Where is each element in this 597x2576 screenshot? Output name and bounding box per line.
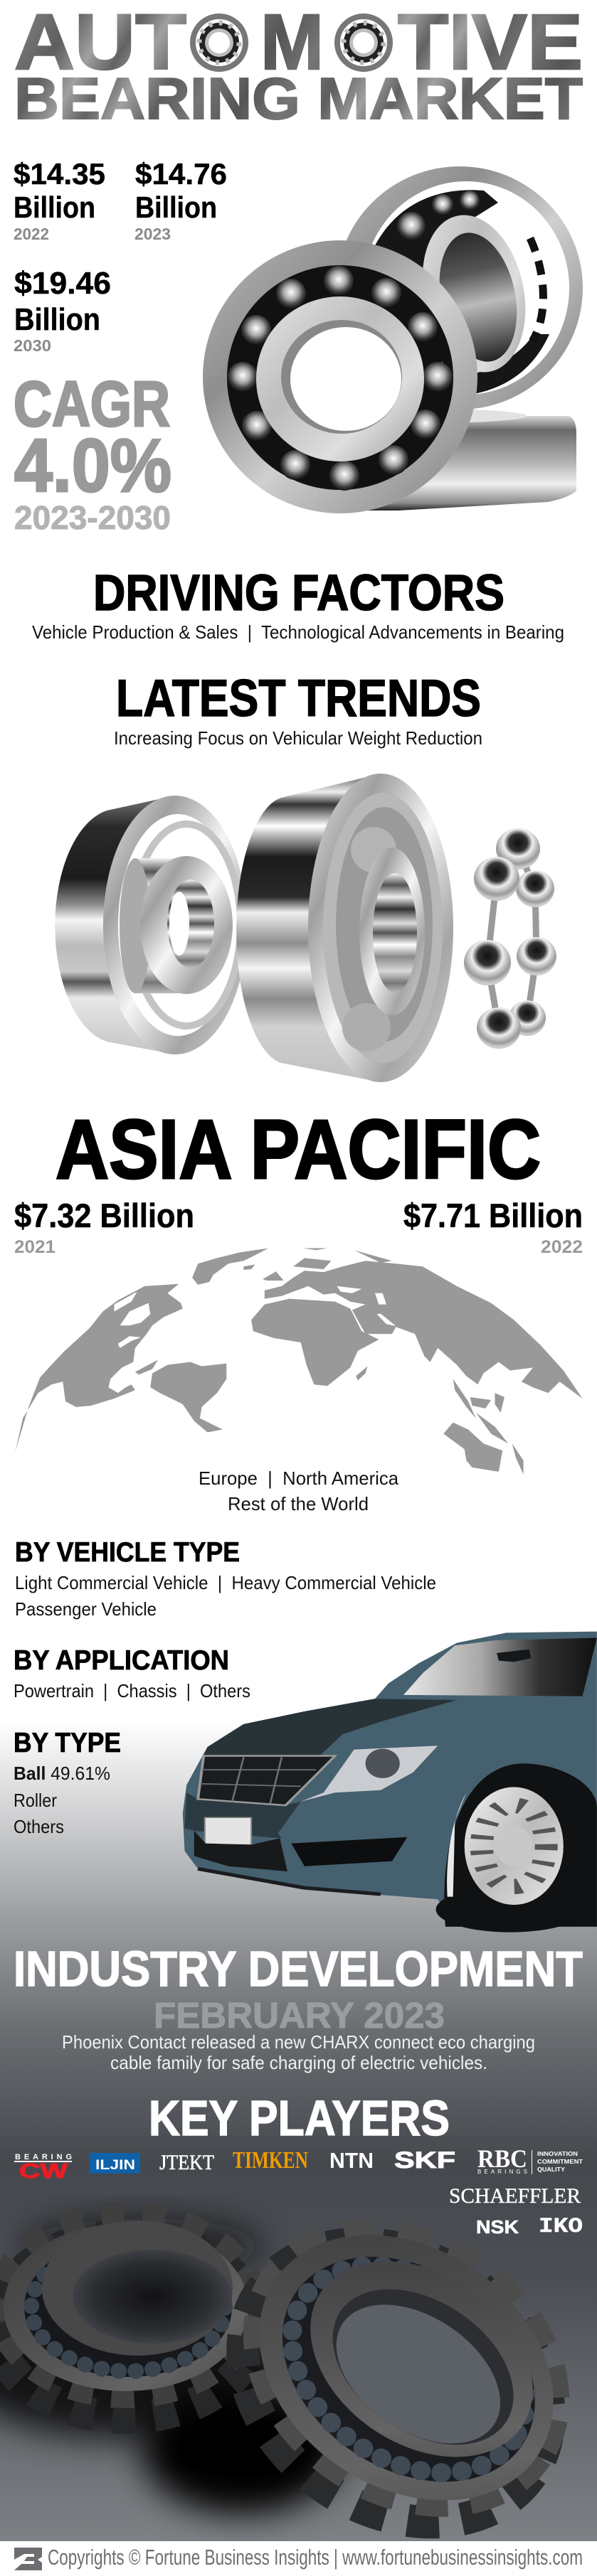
logo: rbc bearings: BEARINGS <box>477 2169 527 2175</box>
tyre bottom <box>436 1886 584 1933</box>
stat: asia pacific 2022: 2022 <box>541 1237 583 1257</box>
rim <box>465 1787 564 1905</box>
icon: bearing letter O left <box>193 16 245 69</box>
logo: jtekt: JTEKT <box>159 2151 214 2174</box>
logo: ntn: NTN <box>329 2148 374 2173</box>
footer <box>0 2541 597 2576</box>
section: by type: Ball 49.61% <box>14 1763 110 1784</box>
text: development description <box>62 2031 535 2073</box>
logo: rbc bearings <box>477 2144 583 2175</box>
icon: fortune business insights logo <box>14 2548 42 2570</box>
heading: key players: KEY PLAYERS <box>149 2090 450 2146</box>
logo: iljin <box>90 2153 140 2174</box>
logo: schaeffler: SCHAEFFLER <box>449 2184 581 2208</box>
stat: asia pacific 2021: $7.32 Billion <box>14 1197 194 1234</box>
grille bars <box>200 1757 316 1803</box>
text: other regions: Rest of the World <box>228 1493 369 1514</box>
logo: bearing cw <box>14 2153 72 2183</box>
hood <box>204 1699 457 1756</box>
logo: rbc bearings: RBC <box>477 2144 527 2173</box>
bottom bearing cylinder <box>327 409 576 511</box>
stat: 2022 market value <box>14 157 105 243</box>
front lip <box>198 1869 381 1894</box>
title line: automotive <box>14 0 583 86</box>
subheading: february 2023: FEBRUARY 2023 <box>154 1995 445 2036</box>
heading: asia pacific: ASIA PACIFIC <box>56 1103 541 1197</box>
stat: 2023 market value: 2023 <box>134 225 171 243</box>
section: by vehicle type: Light Commercial Vehicle | Heavy Commercial Vehicle <box>15 1572 436 1593</box>
stat: CAGR <box>14 369 171 536</box>
stat: asia pacific 2021: 2021 <box>14 1237 56 1257</box>
stat: 2022 market value: 2022 <box>14 225 49 243</box>
stat: asia pacific 2022 <box>403 1197 583 1257</box>
gradient background panel <box>0 1721 597 2541</box>
gear shadow: lower <box>142 2385 342 2513</box>
front bearing <box>203 240 477 513</box>
icon: bearing letter O right <box>337 16 390 69</box>
stat: 2023 market value: $14.76 <box>135 157 227 191</box>
stat: CAGR: 4.0% <box>14 424 171 508</box>
logo: rbc bearings: COMMITMENT <box>537 2159 583 2165</box>
section: by application: Powertrain | Chassis | Others <box>14 1680 250 1701</box>
text: driving factors list: Vehicle Production & Sales | Technological Advancements in Bearing <box>32 621 564 643</box>
rim spokes <box>482 1805 546 1886</box>
lower grille <box>194 1831 287 1871</box>
left bearing half <box>55 796 247 1054</box>
stat: CAGR: 2023-2030 <box>14 499 171 536</box>
logo: timken: TIMKEN <box>233 2147 308 2174</box>
car body <box>183 1632 597 1927</box>
logo: bearing cw: BEARING <box>15 2153 72 2161</box>
text: development description: cable family for safe charging of electric vehicles. <box>110 2052 487 2073</box>
section: by vehicle type <box>15 1537 436 1620</box>
section: by application: BY APPLICATION <box>14 1645 229 1676</box>
fog light vent <box>291 1837 407 1866</box>
logo: bearing cw: CW <box>19 2160 68 2183</box>
stat: asia pacific 2021 <box>14 1197 194 1257</box>
title line: automotive: M <box>260 0 324 86</box>
title line: bearing market: BEARING MARKET <box>14 65 583 132</box>
stat: 2023 market value: Billion <box>135 191 217 224</box>
gear shadow: left <box>0 2297 285 2439</box>
map: world globe <box>15 1248 583 1475</box>
stat: 2022 market value: $14.35 <box>14 157 105 191</box>
section: by type: Roller <box>14 1790 57 1811</box>
fender highlight <box>447 1792 466 1897</box>
grille <box>198 1756 335 1805</box>
stat: 2022 market value: Billion <box>14 191 95 224</box>
right gear <box>189 2172 597 2576</box>
wheel arch and tyre <box>444 1763 597 1927</box>
right bearing half <box>236 774 453 1082</box>
section: by application <box>14 1645 250 1701</box>
logo: iljin: ILJIN <box>95 2158 135 2173</box>
text: latest trends item: Increasing Focus on Vehicular Weight Reduction <box>114 727 482 749</box>
ball cage <box>464 828 556 1049</box>
heading: driving factors: DRIVING FACTORS <box>93 565 504 621</box>
stat: 2023 market value <box>134 157 227 243</box>
section: by type: Others <box>14 1816 64 1837</box>
text: other regions: Europe | North America <box>199 1468 399 1489</box>
image: blue car <box>183 1632 597 1933</box>
stat: 2030 market value: $19.46 <box>14 266 111 301</box>
stat: CAGR: CAGR <box>14 369 170 440</box>
text: other regions <box>199 1468 399 1514</box>
logo: iko: IKO <box>539 2215 583 2239</box>
stat: asia pacific 2022: $7.71 Billion <box>403 1197 583 1234</box>
stat: 2030 market value: 2030 <box>14 336 51 355</box>
gear shadow: top <box>21 2218 263 2275</box>
logo: rbc bearings: QUALITY <box>537 2166 566 2173</box>
logo: nsk: NSK <box>476 2216 519 2238</box>
section: by type: BY TYPE <box>14 1728 121 1758</box>
stat: 2030 market value <box>14 266 111 355</box>
title <box>14 0 583 132</box>
hub <box>495 1826 533 1866</box>
title line: automotive: TIVE <box>398 0 583 86</box>
text: development description: Phoenix Contact released a new CHARX connect eco charging <box>62 2031 535 2053</box>
rear-view mirror <box>497 1650 531 1662</box>
image: stacked ball bearings <box>203 166 583 513</box>
back bearing <box>337 166 583 410</box>
license plate <box>205 1817 251 1844</box>
section: by vehicle type: Passenger Vehicle <box>15 1598 157 1620</box>
bumper dark panel <box>184 1792 301 1839</box>
section: by vehicle type: BY VEHICLE TYPE <box>15 1537 240 1568</box>
windshield <box>403 1638 597 1696</box>
image: metal gear bearings <box>0 2172 597 2576</box>
image: exploded chrome bearing <box>55 774 556 1082</box>
stat: 2030 market value: Billion <box>14 302 100 337</box>
headlight <box>301 1746 438 1802</box>
headlight lens <box>366 1749 400 1778</box>
ball elements <box>228 266 453 491</box>
title line: automotive: AUT <box>14 0 186 86</box>
logo: rbc bearings: INNOVATION <box>537 2151 578 2157</box>
logo: skf: SKF <box>394 2147 455 2173</box>
section: by type <box>14 1728 121 1837</box>
left gear <box>0 2214 255 2417</box>
heading: latest trends: LATEST TRENDS <box>116 670 481 727</box>
